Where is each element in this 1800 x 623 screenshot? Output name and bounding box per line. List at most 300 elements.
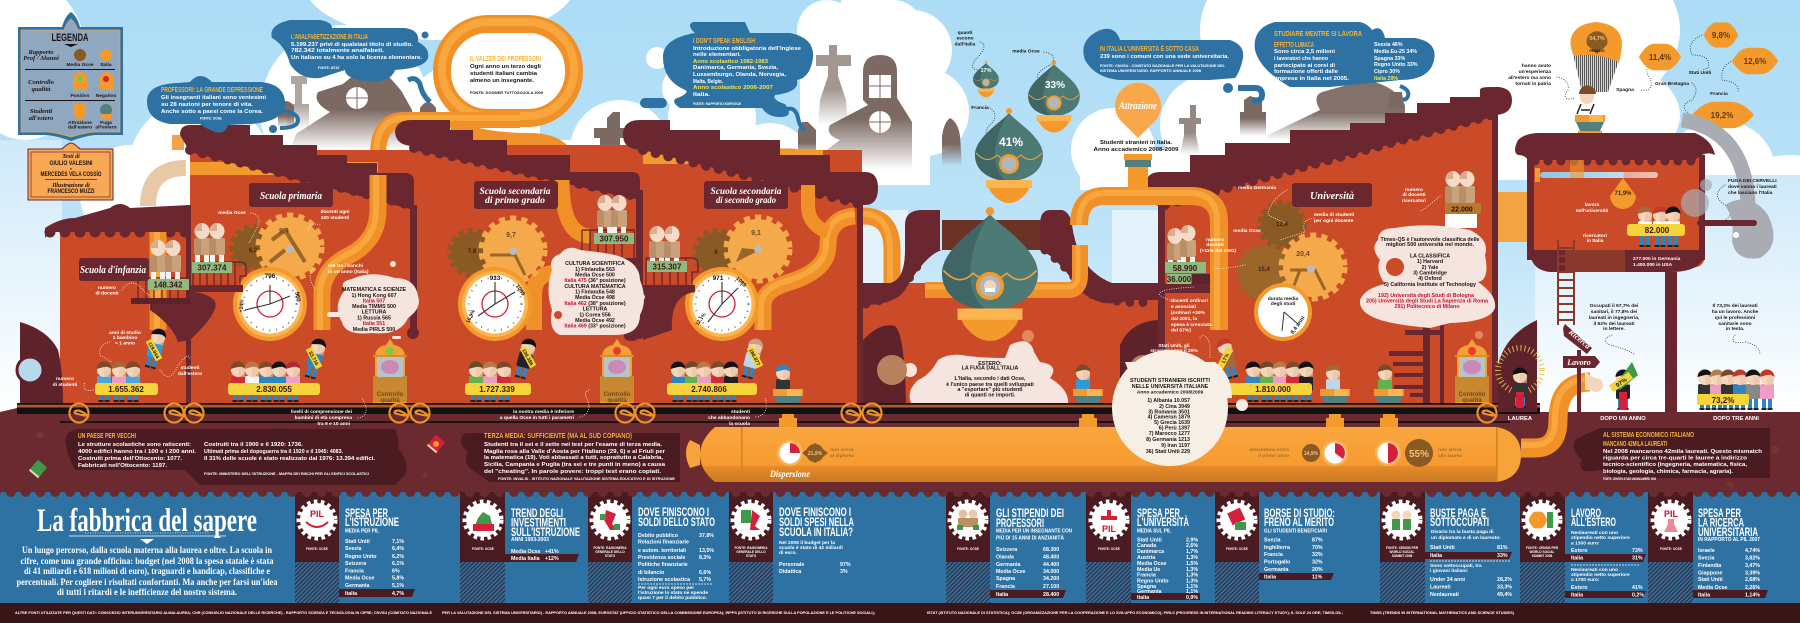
upper building connector: [1498, 192, 1528, 242]
annotation labels interior: in un anno (Italia): [328, 269, 369, 275]
dispersion stats: al diploma: [830, 453, 854, 459]
graduate one year: [1609, 362, 1638, 410]
label: universita: [1292, 183, 1372, 207]
label: universita: Università: [1310, 190, 1354, 202]
panel: lavoro estero: a 1700 euro:: [1571, 577, 1600, 583]
panel: lavoro estero: Neolaureati con uno: [1571, 530, 1618, 536]
panel: spesa per istruzione: 6,2%: [392, 554, 404, 560]
lemons brain drain: 19,2%: [1711, 111, 1733, 120]
church two windows: [869, 75, 891, 133]
building: secondo grado wall: [640, 150, 862, 405]
clock: primo grado: 1089: [514, 284, 526, 297]
pale pipe left: [148, 135, 186, 206]
intro paragraph: percentuali. Per cogliere i risultati confortanti. Ma anche per farsi un'idea: [16, 578, 278, 588]
balconies: [131, 262, 246, 342]
plaques: [95, 383, 1312, 395]
panel: spesa per istruzione: 5,8%: [392, 576, 404, 582]
thought blob: cultura scientifica: CULTURA MATEMATICA: [564, 284, 626, 290]
panel: spesa per istruzione: 5,1%: [392, 583, 404, 589]
lower sky right: [1535, 175, 1800, 415]
annotation labels interior: dal 2001, la: [1171, 316, 1197, 322]
thought blob: cultura scientifica: CULTURA SCIENTIFICA: [565, 261, 625, 267]
panel: spesa per istruzione: FONTE: OCSE: [306, 547, 328, 551]
panel: spesa per universita: 1,7%: [1186, 549, 1198, 555]
students blob: 2) Cina 3949: [1159, 404, 1190, 410]
roof: universita: [1145, 87, 1512, 206]
panel: ricerca universitaria: 4,74%: [1745, 548, 1760, 554]
gears: universita: 15,4: [1258, 267, 1270, 273]
panel: soldi spesi scuola: SCUOLA IN ITALIA?: [779, 525, 853, 539]
panel: borse di studio: GLI STUDENTI BENEFICIARI: [1264, 528, 1327, 534]
bubble: universita sotto casa: 239 sono i comuni con una sede universitaria.: [1100, 54, 1230, 60]
icon: book cog: [733, 502, 769, 538]
bubble: walzer professori text: almeno un insegnante.: [470, 78, 535, 84]
panel: stipendi professori: PROFESSORI: [996, 516, 1044, 530]
gears: universita: 12,4: [1276, 222, 1288, 228]
scallops: primo grado: [414, 148, 640, 197]
legend: Attrazione: [68, 120, 92, 126]
stage labels: DOPO TRE ANNI: [1713, 416, 1759, 422]
scallop edge: [0, 487, 1800, 497]
legend: all'estero: [95, 124, 117, 130]
annotation labels interior: media Ocse: [1233, 228, 1261, 234]
column boxes: [295, 492, 1693, 562]
falling kids with sashes: LT%: [1221, 352, 1231, 364]
panel: ricerca universitaria: UNIVERSITARIA: [1698, 525, 1758, 539]
gears: secondo grado: 9,1: [751, 230, 761, 237]
panel: borse di studio: Svezia: [1264, 538, 1281, 544]
researchers: 82.000: [1645, 226, 1670, 235]
panel: stipendi professori: 34.000: [1043, 569, 1059, 575]
students blob: 1) Albania 10.057: [1147, 398, 1190, 404]
annotation labels interior: docenti ogni: [320, 209, 350, 215]
bubble: studiare mentre lavora: Regno Unito 33%: [1374, 62, 1418, 68]
panel: buste paga: [1384, 502, 1512, 598]
signpost: [1563, 324, 1603, 412]
panel: spesa per universita: Stati Uniti: [1137, 538, 1162, 544]
thought blob: matematica: Media TIMMS 500: [352, 304, 396, 310]
panel: ricerca universitaria: Media Ocse: [1698, 585, 1727, 591]
panel: stipendi professori: 44.400: [1043, 562, 1059, 568]
occupati text: in lettere.: [1603, 326, 1626, 332]
falling kids with sashes: 136.386: [520, 348, 534, 367]
clock: primaria: 960: [293, 291, 301, 303]
panel: buste paga: WORLD SOCIAL: [1390, 550, 1415, 554]
bubble: professori: Gli insegnanti italiani sono ventesimi: [161, 95, 267, 101]
text panel: terza media: Studenti tra il sei e il sette nei test per l'esame di terza media.: [484, 442, 663, 448]
panel: ricerca universitaria: 1,14%: [1745, 592, 1760, 598]
panel: lavoro estero: Estero: [1571, 585, 1588, 591]
legend: Negativo: [96, 93, 116, 99]
bubble: studiare mentre lavora: [1255, 22, 1435, 100]
annotation labels interior: del 67%): [1171, 328, 1191, 334]
balloon labels: tornati in patria: [1515, 81, 1551, 87]
thought blob: cultura scientifica: Media Ocse 492: [575, 318, 615, 324]
thought blob: cultura scientifica: [548, 248, 645, 335]
dispersion stats: il primo anno: [1258, 453, 1289, 459]
laurea door: [1498, 320, 1542, 412]
panel: spesa per istruzione: Stati Uniti: [345, 539, 370, 545]
lemons brain drain: 11,4%: [1649, 53, 1671, 62]
panel: ricerca universitaria: LA RICERCA: [1698, 516, 1744, 530]
panel: dove finiscono soldi stato: 8,3%: [699, 555, 711, 561]
balloon labels: hanno avuto: [1522, 63, 1551, 69]
bubble: walzer professori text: Ogni anno un terzo degli: [470, 64, 542, 70]
icon: teachers cog: [950, 502, 986, 538]
thought blob: cultura scientifica: Media Ocse 498: [575, 295, 615, 301]
pipe: primaria: [320, 175, 378, 330]
domes: 41%: [999, 135, 1023, 149]
students blob: STUDENTI STRANIERI ISCRITTI: [1130, 378, 1211, 384]
panel: dove finiscono soldi stato: SOLDI DELLO STATO: [638, 515, 715, 529]
panel: dove finiscono soldi stato: FONTE: RAGIONERIA: [593, 546, 627, 550]
gears: primo grado: [450, 219, 544, 281]
panel: stipendi professori: Spagna: [996, 576, 1015, 582]
clock: universita: durata media: [1268, 296, 1298, 302]
73,2 text: ha un lavoro. Anche: [1712, 309, 1759, 315]
panel: borse di studio: FRENO AL MERITO: [1264, 515, 1334, 529]
panel: spesa per universita: MEDIA SUL PIL: [1137, 528, 1172, 534]
panel: spesa per istruzione: Italia: [345, 591, 357, 597]
label: secondo grado: [704, 181, 788, 209]
thought blob: matematica: Italia 507: [363, 298, 385, 304]
panel: lavoro estero: 73%: [1632, 548, 1643, 554]
panel: buste paga: Neolaureati: [1430, 592, 1459, 598]
ring pipe: [442, 22, 574, 118]
label: secondo grado: Scuola secondaria: [710, 187, 782, 197]
icon: book money cog: [1219, 502, 1255, 538]
teachers: secondo grado: [649, 226, 680, 270]
footer sources: ISTAT (ISTITUTO NAZIONALE DI STATISTICA); OCSE (ORGANIZZAZIONE PER LA COOPERAZIONE E LO SVILUPPO ECONOMICO); PIRLS (PROGRESS IN INTERNATIONAL READING LITERACY STUDY); IL SOLE 24 ORE; TIMSS-OIL;: [927, 611, 1343, 615]
dispersion tank: [686, 427, 1521, 482]
gears: universita: [1238, 203, 1344, 300]
kids group secondo grado: [670, 362, 738, 402]
central dark arch roof: [862, 210, 1160, 305]
text panel: sistema economico: riguarda per circa tre-quarti le lauree a indirizzo: [1603, 456, 1748, 462]
text panel: sistema economico: [1574, 428, 1770, 481]
building: orange strip secondo grado: [643, 150, 823, 164]
university blob: 4) Oxford: [1418, 276, 1442, 282]
panel: trend investimenti: FONTE: OCSE: [472, 547, 494, 551]
stage labels: LAUREA: [1508, 416, 1533, 422]
roof: primo grado: [395, 120, 640, 200]
panel: borse di studio: 87%: [1312, 538, 1323, 544]
dome labels: dall'Italia: [955, 42, 976, 48]
panel: ricerca universitaria: Italia: [1698, 592, 1710, 598]
text panel: un paese per vecchi: Fabbricati nell'Ottocento: 1197.: [78, 463, 168, 469]
thought blob: cultura scientifica: 1) Finlandia 563: [575, 267, 615, 273]
panel: buste paga: FONTE: CENSIS PER: [1386, 546, 1419, 550]
upper building labels: in Italia: [1587, 238, 1604, 244]
annotation labels interior: 100 studenti: [321, 215, 350, 221]
quality labels: qualità: [1462, 398, 1482, 404]
panel: buste paga: i giovani italiani:: [1430, 568, 1469, 574]
panel: buste paga: Laureati: [1430, 584, 1451, 590]
university blob: LA CLASSIFICA: [1410, 254, 1450, 260]
thought blob: matematica: MATEMATICA E SCIENZE: [342, 287, 406, 293]
gears: secondo grado: [695, 218, 789, 280]
panel: borse di studio: 70%: [1312, 545, 1323, 551]
thought blob: matematica: Media PIRLS 500: [353, 327, 395, 333]
bubble: english: Lussemburgo, Olanda, Norvegia,: [693, 72, 787, 78]
falling kids with sashes: 186.877: [747, 348, 761, 367]
panel: dove finiscono soldi stato: l'istruzione lo stato ne spende: [638, 590, 708, 596]
bubble: studiare mentre lavora: Spagna 33%: [1374, 56, 1405, 62]
panel: ricerca universitaria: Stati Uniti: [1698, 577, 1723, 583]
bubble: english: I DON'T SPEAK ENGLISH: [693, 38, 755, 45]
lemons brain drain: [1639, 22, 1778, 128]
panel: spesa per universita: Italia: [1137, 595, 1149, 601]
sky background: [0, 0, 1800, 420]
balloon labels: Francia: [1710, 91, 1728, 97]
bubble: studiare mentre lavora: STUDIARE MENTRE SI LAVORA: [1274, 31, 1362, 38]
text panel: sistema economico: MANCANO 42MILA LAUREATI: [1603, 441, 1667, 448]
annotation labels interior: ricercatori: [1402, 198, 1427, 204]
panel: soldi spesi scuola: Personale: [779, 562, 804, 568]
panel: trend investimenti: TREND DEGLI: [511, 506, 563, 520]
panel: spesa per istruzione: Svizzera: [345, 561, 366, 567]
upper building labels: nell'università: [1576, 208, 1609, 214]
dispersion stats: abbandona entro: [1249, 447, 1289, 453]
dome labels: [955, 30, 1040, 111]
university blob: 5) California Institute of Technology: [1384, 282, 1476, 288]
panel: dove finiscono soldi stato: 13,5%: [699, 548, 714, 554]
icon: pil flask cog: PIL: [1664, 509, 1678, 519]
quality labels: Controllo: [1459, 392, 1486, 398]
upper building labels: [1576, 202, 1681, 268]
intro paragraph: cifre, come una grande officina: budget (nel 2008 la spesa statale è stata: [20, 556, 274, 567]
annotation labels interior: anni di studio: [109, 330, 141, 336]
panel: stipendi professori: 27.100: [1043, 584, 1059, 590]
thought blob: matematica: 1) Hong Kong 607: [351, 293, 397, 299]
teachers tags primaria: 148.342: [154, 280, 183, 290]
plaques: 2.830.055: [256, 385, 292, 394]
pin: attrazione: Attrazione: [1118, 101, 1157, 112]
panel: soldi spesi scuola: GENERALE DELLO: [736, 550, 766, 554]
panel: ricerca universitaria: IN RAPPORTO AL PIL 2007: [1698, 537, 1760, 543]
panel: lavoro estero: WORLD SOCIAL: [1530, 550, 1555, 554]
thought blob: matematica: 1) Russia 565: [357, 316, 391, 322]
text panel: un paese per vecchi: Costruiti tra il 1900 e il 1920: 1736.: [204, 442, 304, 448]
roof: primaria: [180, 125, 414, 210]
gears: primaria: [232, 216, 321, 278]
rail captions: bambini di età compresa: [295, 415, 352, 421]
ladder: [1558, 240, 1574, 325]
label: secondo grado: di secondo grado: [716, 196, 776, 206]
smoke: [1682, 120, 1773, 259]
bubble: analfabetizzazione: [271, 20, 430, 102]
panel: stipendi professori: Germania: [996, 562, 1020, 568]
panel: ricerca universitaria: 2,68%: [1745, 577, 1760, 583]
annotation labels interior: di docenti: [1402, 192, 1426, 198]
panel: lavoro estero: a 1300 euro:: [1571, 540, 1600, 546]
thought blob: matematica: [327, 261, 419, 339]
panel: stipendi professori: FONTE: OCSE: [957, 547, 979, 551]
thought blob: matematica: Italia 551: [363, 321, 385, 327]
bubble: studiare mentre lavora: Svezia 46%: [1374, 42, 1403, 48]
clock: primo grado: [458, 267, 532, 341]
thought blob: cultura scientifica: Italia 475 (36° posizione): [564, 278, 626, 284]
icon: pil cog: PIL: [310, 509, 324, 519]
hot air balloon: 54,7%: [1589, 36, 1605, 42]
panel: spesa per istruzione: Svezia: [345, 546, 362, 552]
credits: [28, 143, 113, 200]
connecting pipe to sign: [1521, 379, 1590, 448]
text panel: un paese per vecchi: Costruiti prima dell'Ottocento: 1077.: [78, 456, 183, 462]
panel: lavoro estero: 31%: [1632, 556, 1643, 562]
bubble: studiare mentre lavora: Sono circa 2,5 milioni: [1274, 49, 1336, 55]
central window panes: [863, 210, 1158, 284]
footer bar: [0, 603, 1800, 623]
legend: all'estero: [29, 115, 54, 122]
panel: lavoro estero: SUMMIT 2008: [1532, 554, 1552, 558]
clock: primo grado: 933: [490, 275, 501, 282]
text panel: sistema economico: tecnico-scientifico (ingegneria, matematica, fisica,: [1603, 462, 1748, 468]
bubble: english: Anno scolastico 1982-1983: [693, 59, 768, 65]
university blob: 192) Università degli Studi di Bologna: [1378, 293, 1474, 299]
bubble: professori: [147, 76, 298, 133]
panel: spesa per istruzione: Francia: [345, 568, 364, 574]
legend: Rapporto: [28, 49, 54, 56]
clock: primaria: 796: [265, 273, 276, 280]
panel: borse di studio: 32%: [1312, 552, 1323, 558]
panel: spesa per universita: Regno Unito: [1137, 578, 1169, 584]
clock: secondo grado: [685, 267, 759, 341]
occupati text: sanitari, il 77,8% dei: [1591, 309, 1638, 315]
balcony primo grado: [580, 230, 637, 341]
panel: spesa per istruzione: SPESA PER: [345, 506, 388, 520]
text panel: un paese per vecchi: UN PAESE PER VECCHI: [78, 433, 136, 440]
scallops central: [866, 250, 1155, 304]
panel: dove finiscono soldi stato: Relazioni finanziarie: [638, 540, 689, 546]
bubble: professori: Anche sotto a paesi come la Corea.: [161, 109, 264, 115]
annotation labels interior: numero: [98, 285, 116, 291]
gears: primo grado: 9,7: [506, 232, 516, 239]
signpost: Lavoro: [1566, 358, 1591, 367]
gears: universita: 20,4: [1296, 251, 1310, 258]
panel: trend investimenti: INVESTIMENTI: [511, 516, 566, 530]
text panel: sistema economico: Nel 2008 mancarono 42mila laureati. Questo mismatch: [1603, 449, 1762, 455]
panel: soldi spesi scuola: di euro.: [779, 550, 797, 556]
quality machines: [373, 339, 1489, 407]
students blob: 8) Germania 1213: [1146, 437, 1190, 443]
footer sources: PER LA VALUTAZIONE DEL SISTEMA UNIVERSITARIO) - RAPPORTO ANNUALE 2008; EUROSTAT (UFFICIO STATISTICO DELLA COMMISSIONE EUROPEA); IRPPS (ISTITUTO DI RICERCHE SULLA POPOLAZIONE E LE POLITICHE SOCIALI);: [442, 611, 875, 615]
bubble: analfabetizzazione: 5.199.237 privi di qualsiasi titolo di studio.: [291, 42, 414, 48]
clouds: [0, 0, 1800, 245]
panel: buste paga: un diplomato e di un laureato:: [1431, 535, 1501, 541]
panel: spesa per universita: Austria: [1137, 555, 1155, 561]
panel: spesa per istruzione: Regno Unito: [345, 554, 377, 560]
legend: Prof / Alunni: [23, 55, 59, 62]
panel: borse di studio: BORSE DI STUDIO:: [1264, 506, 1335, 520]
icon: red book: [427, 435, 445, 453]
bubble: studiare mentre lavora: Cipro 30%: [1374, 69, 1400, 75]
thermometer: [1535, 160, 1658, 182]
annotation labels interior: docenti ordinari: [1171, 298, 1209, 304]
label: scuola infanzia: Scuola d'infanzia: [80, 265, 146, 276]
panel: dove finiscono soldi stato: Previdenza sociale: [638, 555, 685, 561]
label: dispersione: Dispersione: [769, 469, 810, 479]
text panel: un paese per vecchi: Le strutture scolastiche sono ratiscenti:: [78, 442, 191, 448]
panel: buste paga: SOTTOCCUPATI: [1430, 515, 1489, 529]
panel: ricerca universitaria: SPESA PER: [1698, 506, 1741, 520]
hatching below columns: [295, 562, 1693, 603]
occupati text: [1589, 303, 1640, 332]
stairs university: [1389, 325, 1444, 405]
clock: universita: [1254, 283, 1312, 341]
panel: soldi spesi scuola: SOLDI SPESI NELLA: [779, 515, 854, 529]
bubble: professori: su 28 nazioni per tenore di vita.: [161, 102, 254, 108]
legend: Fuga: [100, 120, 112, 126]
panel: buste paga: Sono sottoccupati, tra: [1430, 563, 1482, 569]
panel: borse di studio: Inghilterra: [1264, 545, 1290, 551]
university blob: [1360, 225, 1495, 339]
pin: attrazione: Studenti stranieri in Italia.: [1100, 140, 1173, 146]
annotation labels interior: docenti: [1206, 242, 1224, 248]
connecting pipes behind roofs: [190, 118, 810, 180]
domes: [973, 60, 1080, 203]
panel: lavoro estero: Estero: [1571, 548, 1588, 554]
panel: borse di studio: 11%: [1312, 574, 1323, 580]
quality labels: [377, 392, 1486, 404]
panel: buste paga: Stati Uniti: [1430, 545, 1455, 551]
thought blob: cultura scientifica: Italia 462 (38° posizione): [564, 301, 626, 307]
73,2 text: Il 73,2% dei laureati: [1712, 303, 1758, 309]
dispersion stats: alla laurea: [1438, 453, 1462, 459]
occupati text: il 52% dei laureati: [1593, 321, 1635, 327]
panel: ricerca universitaria: 3,39%: [1745, 570, 1760, 576]
gears: primaria: 9,4: [279, 228, 289, 235]
panel: lavoro estero: Italia: [1571, 556, 1583, 562]
text panel: terza media: Maglia rosa alla Valle d'Aosta per l'italiano (29, 6) e al Friuli per: [484, 449, 665, 455]
bubble: studiare mentre lavora: Italia 29%: [1374, 76, 1398, 82]
panel: spesa per istruzione: MEDIA PER PIL: [345, 528, 380, 534]
bubble: professori: FONTE: OCSE: [200, 116, 222, 120]
annotation labels interior: numero: [1206, 237, 1224, 243]
panel: spesa per universita: Francia: [1137, 572, 1156, 578]
panel: stipendi professori: 48.400: [1043, 554, 1059, 560]
panel: spesa per universita: 2,6%: [1186, 543, 1198, 549]
pipe: universita: [1079, 193, 1219, 330]
text panel: un paese per vecchi: Il 31% delle scuole è stato realizzato dal 1976: 13.394 edifici.: [204, 456, 376, 462]
students blob: 4) Camerun 1879: [1148, 414, 1190, 420]
label: primo grado: [474, 181, 558, 209]
annotation labels interior: = 1 anno: [115, 340, 135, 346]
annotation labels interior: di studenti: [53, 382, 78, 388]
panel: spesa per universita: Canada: [1137, 543, 1156, 549]
bubble: studiare mentre lavora: partecipato ai corsi di: [1274, 63, 1336, 69]
big dome: [942, 207, 1038, 341]
bubble: english: nelle elementari.: [693, 52, 742, 58]
footer sources: [15, 611, 1514, 615]
panel: stipendi professori: Francia: [996, 584, 1015, 590]
university blob: 3) Cambridge: [1413, 270, 1447, 276]
thought blob: estero: L'Italia, secondo i dati Ocse,: [954, 376, 1026, 382]
bubble: analfabetizzazione: 782.342 totalmente analfabeti.: [291, 48, 385, 54]
panel: lavoro estero: 0,2%: [1632, 592, 1644, 598]
rail captions: [291, 390, 766, 427]
panel: trend investimenti: Media Ocse: [511, 549, 540, 555]
annotation labels interior: dall'estero: [178, 371, 202, 377]
thought blob: cultura scientifica: Italia 469 (33° posizione): [564, 324, 626, 330]
panel: spesa per universita: Germania: [1137, 589, 1161, 595]
rail captions: a quella Ocse in tutti i parametri: [500, 415, 575, 421]
legend: LEGENDA: [52, 32, 89, 44]
panel: buste paga: 33%: [1497, 553, 1508, 559]
university blob: 1) Harvard: [1417, 259, 1443, 265]
footer sources: ALTRE FONTI UTILIZZATE PER QUESTI DATI: CONSORZIO INTERUNIVERSITARIO ALMALAUREA; CNR (CONSIGLIO NAZIONALE DELLE RICERCHE) - RAPPORTO SCIENZA E TECNOLOGIA IN CIFRE; CNVSU (COMITATO NAZIONALE: [15, 611, 432, 615]
panel: soldi spesi scuola: scuola è stato di 42 miliardi: [779, 545, 844, 551]
